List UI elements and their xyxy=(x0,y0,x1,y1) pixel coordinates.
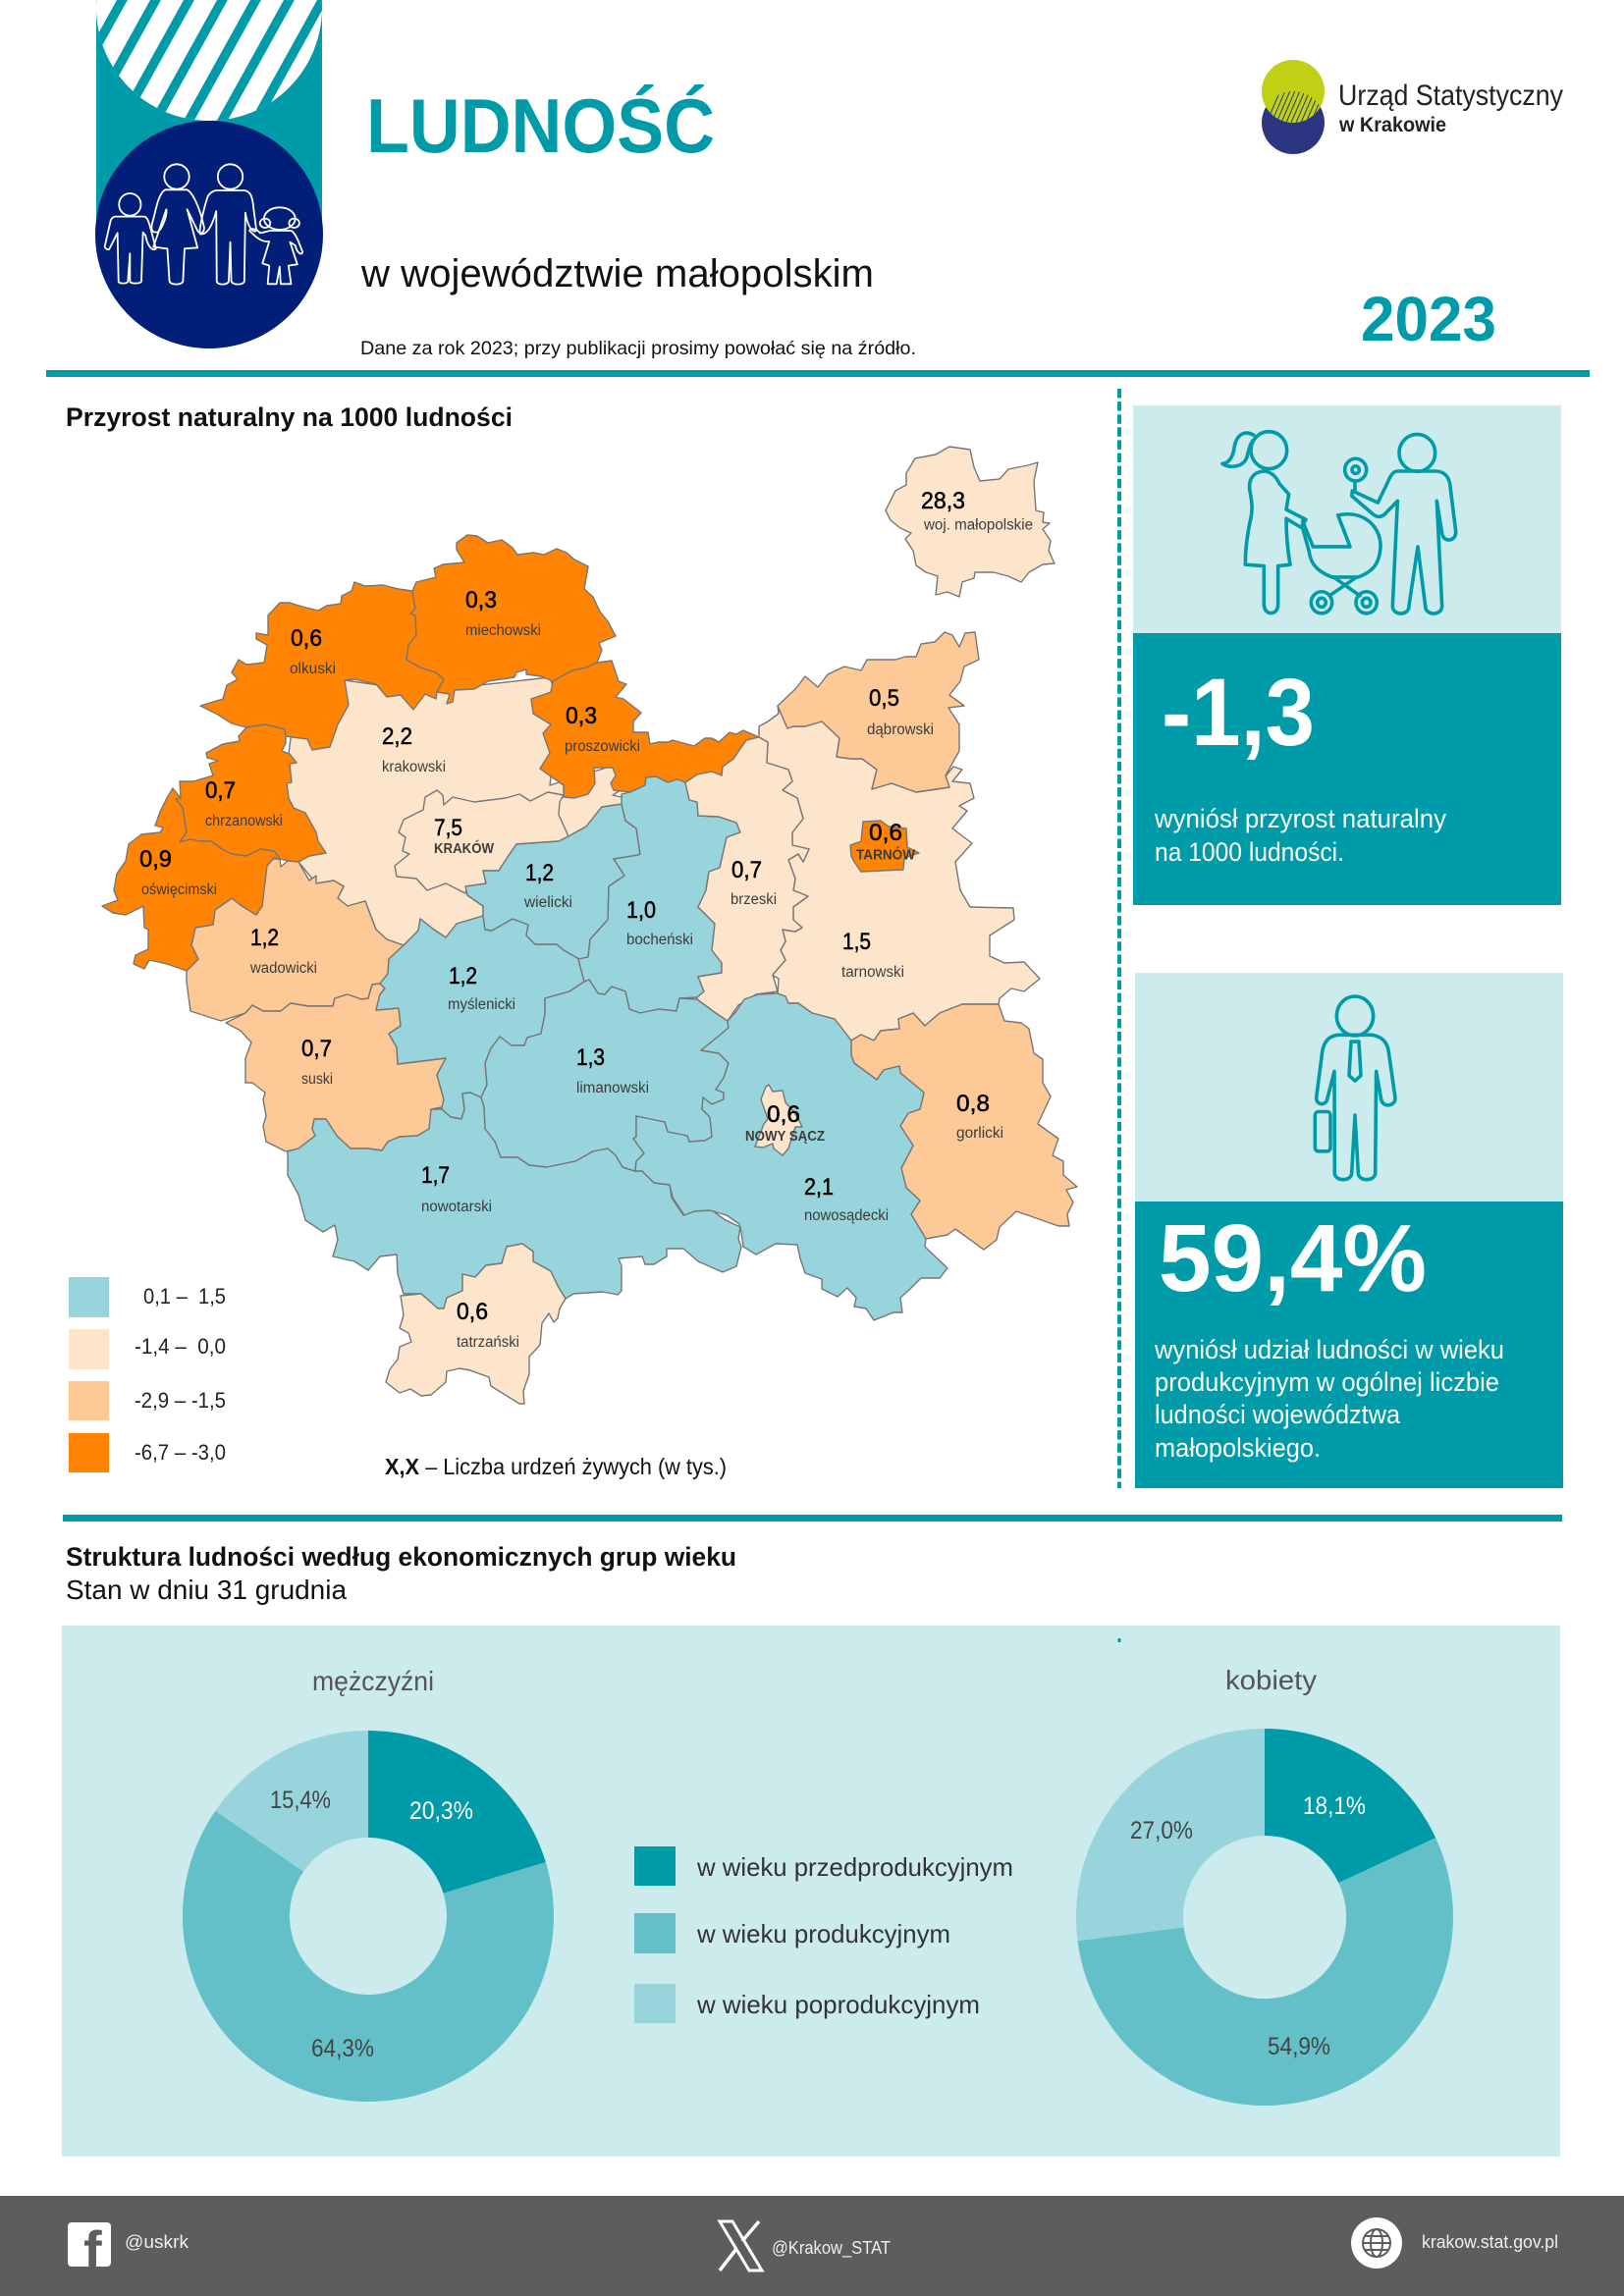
website: krakow.stat.gov.pl xyxy=(1422,2232,1558,2252)
title: LUDNOŚĆ xyxy=(366,82,715,169)
region: gorlicki: gorlicki xyxy=(956,1125,1003,1142)
chart: men donut: 15,4% xyxy=(270,1787,331,1814)
stat value: 59,4% xyxy=(1159,1204,1427,1311)
region: woj. małopolskie total xyxy=(886,447,1055,597)
stat text: produkcyjnym w ogólnej liczbie xyxy=(1155,1367,1499,1397)
region: Kraków xyxy=(395,790,568,893)
region: suski: suski xyxy=(301,1071,333,1088)
region: Kraków: 7,5 xyxy=(434,815,462,841)
region: brzeski xyxy=(685,737,809,1021)
map: natural increase by powiat xyxy=(102,447,1077,1404)
region: proszowicki xyxy=(531,661,759,798)
region: oświęcimski: 0,9 xyxy=(139,846,172,873)
chart: women donut: 54,9% xyxy=(1268,2033,1330,2060)
region: tarnowski: 1,5 xyxy=(842,929,871,955)
region: tatrzański xyxy=(386,1244,566,1404)
chart: men donut xyxy=(183,1666,554,2102)
region: limanowski: 1,3 xyxy=(576,1044,605,1071)
region: dąbrowski: 0,5 xyxy=(869,685,899,712)
region: chrzanowski: 0,7 xyxy=(205,777,236,804)
region: brzeski: 0,7 xyxy=(731,857,762,883)
region: woj. małopolskie total: woj. małopolskie xyxy=(923,516,1033,534)
chart: women donut: 27,0% xyxy=(1130,1817,1193,1844)
region: chrzanowski xyxy=(176,724,326,862)
icon: parents with stroller xyxy=(1222,432,1456,614)
region: wadowicki: wadowicki xyxy=(249,960,317,977)
region: wielicki xyxy=(465,804,640,959)
map legend: -1,4 – 0,0 xyxy=(135,1334,226,1359)
panel: working age share xyxy=(1135,973,1563,1488)
region: nowosądecki: nowosądecki xyxy=(804,1207,889,1224)
chart legend: w wieku poprodukcyjnym xyxy=(696,1990,980,2019)
region: nowosądecki: 2,1 xyxy=(804,1174,834,1201)
stat text: wyniósł przyrost naturalny xyxy=(1154,804,1446,833)
icon: worker with briefcase xyxy=(1315,996,1395,1180)
region: dąbrowski xyxy=(778,632,979,792)
region: limanowski: limanowski xyxy=(576,1080,649,1096)
region: krakowski xyxy=(285,677,628,945)
footer xyxy=(0,2196,1624,2296)
region: Tarnów: TARNÓW xyxy=(856,846,916,864)
region: suski: 0,7 xyxy=(301,1036,332,1062)
region: nowotarski: nowotarski xyxy=(421,1199,492,1215)
region: Kraków: KRAKÓW xyxy=(434,839,495,857)
heading: age structure: Struktura ludności według ekonomicznych grup wieku xyxy=(66,1542,736,1572)
region: suski xyxy=(226,984,446,1151)
icon: globe xyxy=(1351,2217,1402,2269)
chart: women donut: kobiety xyxy=(1225,1665,1317,1695)
chart: women donut xyxy=(1076,1665,1453,2106)
map note: X,X – Liczba urdzeń żywych (w tys.) xyxy=(385,1454,727,1479)
region: limanowski xyxy=(481,980,729,1171)
region: nowotarski xyxy=(288,1093,741,1308)
region: bocheński xyxy=(578,776,740,1013)
region: wielicki: 1,2 xyxy=(525,860,554,886)
heading: age structure: Stan w dniu 31 grudnia xyxy=(66,1575,347,1605)
chart legend: w wieku przedprodukcyjnym xyxy=(696,1852,1013,1882)
region: Nowy Sącz: NOWY SĄCZ xyxy=(745,1128,825,1145)
source note: Dane za rok 2023; przy publikacji prosimy powołać się na źródło. xyxy=(360,338,916,359)
header emblem: teal ribbon with striped circle and family icon xyxy=(95,0,323,348)
region: miechowski: miechowski xyxy=(465,622,541,639)
region: oświęcimski: oświęcimski xyxy=(141,881,217,898)
facebook handle: @uskrk xyxy=(125,2232,189,2252)
map legend: -6,7 – -3,0 xyxy=(135,1440,226,1465)
region: bocheński: 1,0 xyxy=(626,897,656,924)
region: myślenicki: 1,2 xyxy=(449,963,477,989)
region: Nowy Sącz xyxy=(745,1085,825,1155)
chart legend: w wieku produkcyjnym xyxy=(696,1919,950,1949)
region: myślenicki: myślenicki xyxy=(448,996,515,1013)
map legend: -2,9 – -1,5 xyxy=(135,1388,226,1413)
region: olkuski: olkuski xyxy=(290,661,336,677)
stat text xyxy=(1154,804,1446,867)
chart: women donut: 18,1% xyxy=(1303,1792,1366,1820)
panel: natural increase xyxy=(1133,405,1561,905)
map legend: 0,1 – 1,5 xyxy=(143,1284,226,1308)
region: tatrzański: 0,6 xyxy=(457,1299,488,1325)
chart: men donut: 64,3% xyxy=(311,2035,374,2062)
region: brzeski: brzeski xyxy=(731,891,777,908)
region: miechowski xyxy=(406,535,616,704)
region: oświęcimski xyxy=(102,788,280,971)
region: miechowski: 0,3 xyxy=(465,587,497,614)
year: 2023 xyxy=(1361,284,1496,354)
logo: Urząd Statystyczny w Krakowie xyxy=(1262,60,1563,154)
region: gorlicki: 0,8 xyxy=(956,1091,990,1117)
region: proszowicki: proszowicki xyxy=(565,738,640,755)
stat text: wyniósł udział ludności w wieku xyxy=(1154,1335,1504,1364)
heading: age structure xyxy=(66,1542,736,1605)
region: proszowicki: 0,3 xyxy=(566,703,597,729)
region: myślenicki xyxy=(376,916,584,1119)
region: chrzanowski: chrzanowski xyxy=(205,813,283,829)
region: krakowski: 2,2 xyxy=(382,723,412,750)
region: nowosądecki xyxy=(633,993,947,1320)
region: wadowicki: 1,2 xyxy=(250,925,279,951)
region: tatrzański: tatrzański xyxy=(457,1334,519,1351)
region: tarnowski xyxy=(759,706,1040,1041)
region: dąbrowski: dąbrowski xyxy=(867,721,934,738)
icon: X xyxy=(720,2221,762,2270)
region: Nowy Sącz: 0,6 xyxy=(767,1101,800,1128)
region: Tarnów xyxy=(850,820,919,872)
chart: men donut: 20,3% xyxy=(409,1797,473,1825)
stat value: -1,3 xyxy=(1162,659,1315,766)
region: Tarnów: 0,6 xyxy=(869,820,902,846)
X handle: @Krakow_STAT xyxy=(772,2238,891,2259)
chart legend xyxy=(634,1846,1013,2023)
region: krakowski: krakowski xyxy=(382,759,446,775)
region: bocheński: bocheński xyxy=(626,932,693,948)
stat text: ludności województwa xyxy=(1155,1400,1401,1429)
icon: family xyxy=(105,164,302,285)
region: nowotarski: 1,7 xyxy=(421,1162,450,1189)
heading: map: Przyrost naturalny na 1000 ludności xyxy=(66,402,513,432)
map legend xyxy=(69,1277,226,1472)
icon: facebook: f xyxy=(83,2219,102,2281)
subtitle: w województwie małopolskim xyxy=(360,252,874,295)
region: olkuski xyxy=(200,582,444,750)
stat text: na 1000 ludności. xyxy=(1155,837,1344,867)
region: woj. małopolskie total: 28,3 xyxy=(921,488,965,514)
panel: donut charts xyxy=(62,1626,1560,2157)
region: tarnowski: tarnowski xyxy=(841,964,904,981)
stat text: małopolskiego. xyxy=(1155,1433,1321,1463)
chart: men donut: mężczyźni xyxy=(312,1666,434,1696)
stat text xyxy=(1154,1335,1504,1463)
region: wielicki: wielicki xyxy=(523,894,572,911)
logo: Urząd Statystyczny w Krakowie: w Krakowie xyxy=(1338,114,1446,136)
region: gorlicki xyxy=(851,1004,1077,1250)
region: olkuski: 0,6 xyxy=(291,625,322,652)
logo: Urząd Statystyczny w Krakowie: Urząd Statystyczny xyxy=(1338,80,1563,112)
icon: facebook xyxy=(68,2222,111,2267)
region: wadowicki xyxy=(187,859,404,1021)
